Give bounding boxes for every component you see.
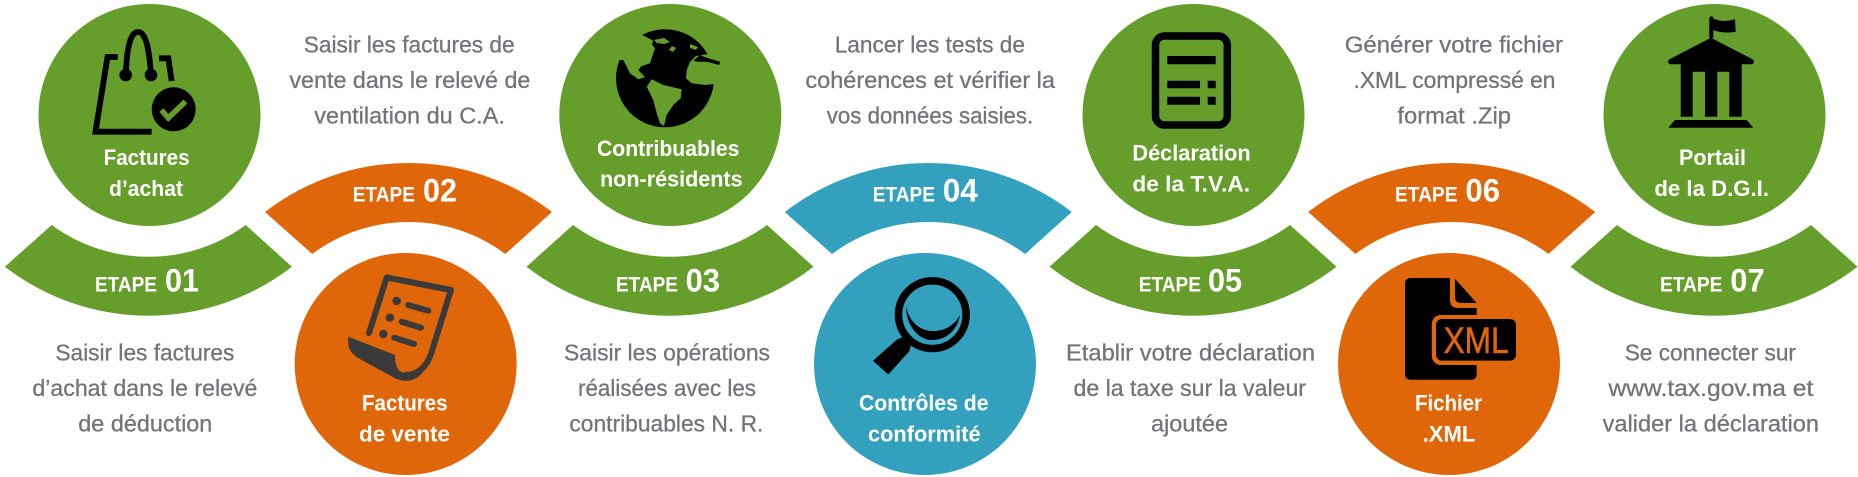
description: etape 04: vos données saisies.: [827, 102, 1033, 128]
description: etape 02: Saisir les factures de: [304, 31, 515, 57]
description: etape 06: .XML compressé en: [1354, 67, 1556, 93]
description: etape 01: Saisir les factures: [55, 340, 234, 366]
panel: étape 07 portail de la D.G.I.: [1570, 4, 1858, 437]
panel: étape 04 contrôles de conformité: [785, 31, 1072, 475]
badge: portail de la D.G.I.: [1604, 4, 1826, 226]
badge title: [1654, 145, 1769, 201]
badge title: Déclaration: [1132, 141, 1251, 166]
arc: etape 03: [526, 225, 814, 316]
badge title: [359, 391, 450, 447]
description: etape 01: [32, 340, 257, 437]
arc: etape 06: ETAPE: [1395, 183, 1458, 207]
description: etape 03: contribuables N. R.: [569, 411, 763, 437]
badge title: Factures: [362, 391, 448, 416]
arc: etape 05: ETAPE: [1139, 273, 1201, 297]
description: etape 06: [1345, 31, 1563, 128]
badge: contrôles de conformité: [814, 253, 1036, 475]
icon: government building: [1668, 16, 1754, 128]
panel: étape 06 fichier XML: [1308, 31, 1595, 475]
panel: étape 01 factures d'achat: [5, 4, 292, 437]
arc: etape 06: 06: [1465, 173, 1500, 209]
icon: shopping bag with check: [96, 32, 196, 132]
panel: étape 05 déclaration de la T.V.A.: [1050, 4, 1336, 437]
arc: etape 05: 05: [1208, 263, 1242, 299]
badge title: conformité: [868, 422, 981, 447]
circle background: [295, 253, 517, 475]
description: etape 04: [805, 31, 1055, 128]
description: etape 02: [289, 31, 530, 128]
description: etape 03: Saisir les opérations: [564, 340, 770, 366]
arc: etape 01: [5, 225, 292, 316]
arc: etape 01: 01: [165, 263, 199, 299]
arc: etape 02: 02: [423, 173, 457, 209]
circle background: [1604, 4, 1826, 226]
panel: étape 03 contribuables non-résidents: [526, 4, 814, 437]
circle background: [814, 253, 1036, 475]
description: etape 03: réalisées avec les: [578, 375, 756, 401]
description: etape 05: ajoutée: [1151, 411, 1228, 437]
icon: XML file: [1405, 278, 1516, 380]
arc: etape 02: ETAPE: [353, 183, 415, 207]
arc: etape 02: [265, 163, 552, 254]
arc: etape 05: [1050, 225, 1336, 316]
arc: etape 01: ETAPE: [95, 273, 157, 297]
badge: fichier XML: [1338, 253, 1560, 475]
badge title: de la D.G.I.: [1654, 176, 1769, 201]
description: etape 01: de déduction: [78, 411, 212, 437]
circle background: [559, 4, 781, 226]
description: etape 05: de la taxe sur la valeur: [1074, 375, 1306, 401]
circle background: [1338, 253, 1560, 475]
description: etape 07: Se connecter sur: [1625, 340, 1796, 366]
description: etape 07: valider la déclaration: [1603, 411, 1819, 437]
description: etape 04: Lancer les tests de: [835, 31, 1025, 57]
description: etape 02: vente dans le relevé de: [289, 67, 530, 93]
badge title: [104, 145, 190, 201]
icon: globe: [610, 29, 723, 127]
description: etape 07: [1603, 340, 1819, 437]
badge: factures d'achat: [38, 4, 260, 226]
icon: XML file: XML: [1444, 320, 1509, 361]
badge title: Portail: [1679, 145, 1746, 170]
badge title: de la T.V.A.: [1132, 172, 1250, 197]
badge title: Factures: [104, 145, 190, 170]
arc: etape 07: 07: [1730, 263, 1765, 299]
badge title: [1132, 141, 1251, 197]
badge title: de vente: [359, 422, 450, 447]
badge title: Contrôles de: [859, 391, 988, 416]
description: etape 04: cohérences et vérifier la: [805, 67, 1055, 93]
arc: etape 04: 04: [943, 173, 978, 209]
arc: etape 03: ETAPE: [616, 273, 678, 297]
badge title: [1415, 391, 1482, 447]
arc: etape 07: [1570, 225, 1858, 316]
badge title: d’achat: [109, 176, 184, 201]
badge title: Contribuables: [597, 136, 739, 161]
arc: etape 04: [785, 163, 1072, 254]
arc: etape 06: [1308, 163, 1595, 254]
badge: déclaration de la T.V.A.: [1082, 4, 1304, 226]
description: etape 05: [1066, 340, 1315, 437]
badge title: .XML: [1423, 422, 1475, 447]
icon: receipt scroll: [348, 278, 451, 381]
icon: form document: [1156, 36, 1227, 125]
description: etape 07: www.tax.gov.ma et: [1607, 375, 1814, 401]
badge title: Fichier: [1415, 391, 1482, 416]
arc: etape 04: ETAPE: [873, 183, 935, 207]
description: etape 01: d’achat dans le relevé: [32, 375, 257, 401]
arc: etape 03: 03: [686, 263, 720, 299]
badge title: [597, 136, 743, 192]
description: etape 05: Etablir votre déclaration: [1066, 340, 1315, 366]
badge: contribuables non-résidents: [559, 4, 781, 226]
description: etape 02: ventilation du C.A.: [314, 102, 505, 128]
icon: magnifying glass: [873, 281, 966, 374]
badge title: [859, 391, 988, 447]
arc: etape 07: ETAPE: [1660, 273, 1722, 297]
description: etape 03: [564, 340, 770, 437]
circle background: [1082, 4, 1304, 226]
panel: étape 02 factures de vente: [265, 31, 552, 475]
description: etape 06: format .Zip: [1397, 102, 1511, 128]
description: etape 06: Générer votre fichier: [1345, 31, 1563, 57]
circle background: [38, 4, 260, 226]
badge: factures de vente: [295, 253, 517, 475]
badge title: non-résidents: [600, 167, 743, 192]
